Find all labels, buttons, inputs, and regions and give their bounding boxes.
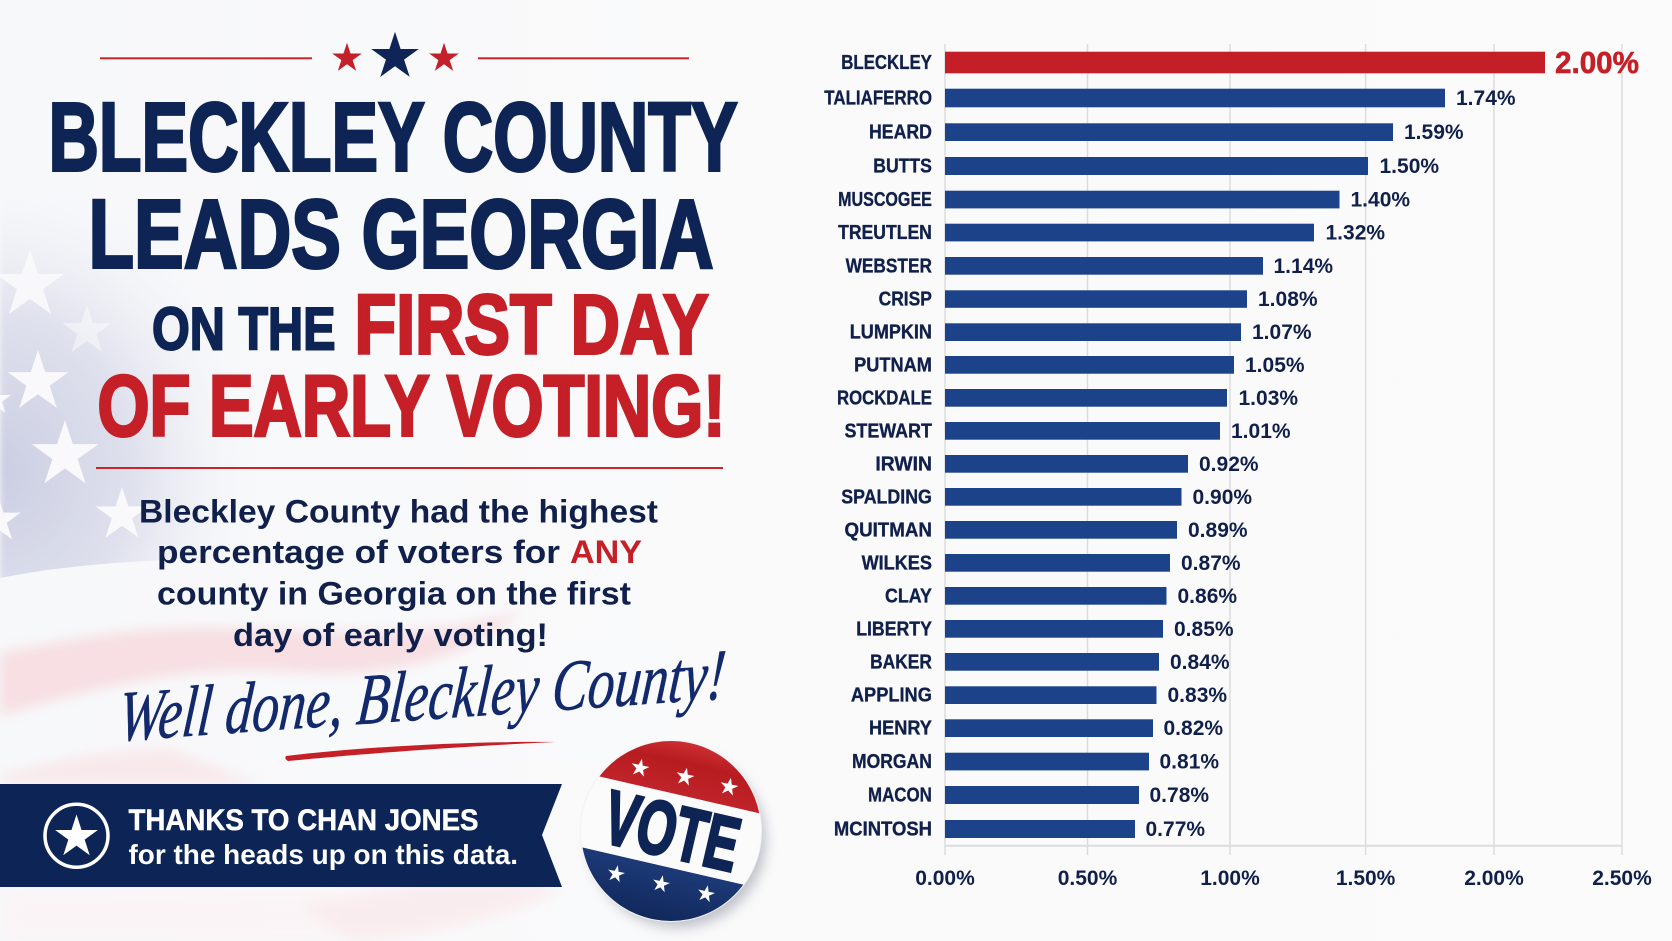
- value labels: 0.78%: [1150, 784, 1209, 807]
- title: BLECKLEY COUNTY: [48, 82, 738, 192]
- description text: ANY: [570, 534, 642, 570]
- county labels: BUTTS: [873, 156, 932, 178]
- county labels: BAKER: [870, 652, 932, 674]
- description text: Bleckley County had the highest: [139, 493, 658, 529]
- top ornament: rules and stars: [100, 32, 689, 77]
- value labels: 1.05%: [1245, 354, 1305, 377]
- value labels: 1.08%: [1258, 288, 1318, 311]
- title: ON THE: [152, 296, 336, 362]
- description text: day of early voting!: [233, 617, 548, 653]
- county labels: HEARD: [869, 122, 932, 144]
- title: LEADS GEORGIA: [88, 180, 714, 288]
- value labels: 0.83%: [1168, 684, 1227, 707]
- county labels: TREUTLEN: [838, 222, 932, 244]
- axis labels: 1.00%: [1200, 867, 1260, 890]
- county labels: [824, 88, 932, 840]
- county labels: MUSCOGEE: [838, 189, 932, 211]
- value labels: 1.03%: [1238, 387, 1298, 410]
- title: [48, 82, 738, 454]
- value labels: [1146, 87, 1516, 841]
- axis labels: 0.50%: [1058, 867, 1118, 890]
- title: OF EARLY VOTING!: [98, 358, 726, 454]
- value labels: 0.92%: [1199, 453, 1259, 476]
- axis labels: 1.50%: [1336, 867, 1396, 890]
- county bars: [945, 89, 1445, 838]
- value labels: 1.74%: [1456, 87, 1516, 110]
- value labels: 1.14%: [1274, 255, 1333, 278]
- county labels: LIBERTY: [856, 618, 932, 640]
- county labels: MACON: [868, 784, 932, 806]
- county labels: PUTNAM: [854, 354, 932, 376]
- highlighted bar: Bleckley: BLECKLEY: [841, 52, 932, 74]
- value labels: 0.81%: [1160, 750, 1219, 773]
- county labels: LUMPKIN: [850, 322, 932, 344]
- value labels: 0.82%: [1164, 717, 1223, 740]
- value labels: 1.40%: [1350, 188, 1410, 211]
- red underline swoosh: [285, 742, 555, 761]
- county labels: MCINTOSH: [834, 818, 932, 840]
- county labels: SPALDING: [841, 486, 932, 508]
- vote button: [582, 741, 772, 934]
- icon: star in circle: [45, 804, 108, 867]
- value labels: 1.07%: [1252, 321, 1312, 344]
- axis labels: 2.50%: [1592, 867, 1652, 890]
- description text: percentage of voters for: [157, 534, 560, 570]
- vote button: VOTE: [596, 775, 748, 888]
- highlighted bar: Bleckley: [841, 45, 1639, 80]
- county labels: ROCKDALE: [837, 388, 932, 410]
- county labels: MORGAN: [852, 751, 932, 773]
- ribbon: thanks: for the heads up on this data.: [128, 839, 518, 870]
- value labels: 1.59%: [1404, 121, 1464, 144]
- ribbon: thanks: [0, 784, 562, 887]
- value labels: 1.01%: [1231, 420, 1291, 443]
- description text: [139, 493, 658, 653]
- axis labels: 2.00%: [1464, 867, 1524, 890]
- value labels: 0.86%: [1178, 585, 1237, 608]
- axis labels: [915, 867, 1652, 890]
- chart gridlines and axis: [945, 44, 1622, 855]
- county labels: APPLING: [851, 684, 932, 706]
- value labels: 1.50%: [1380, 155, 1439, 178]
- county labels: CLAY: [885, 586, 932, 608]
- script message: Well done, Bleckley County!: [116, 633, 729, 757]
- value labels: 1.32%: [1326, 221, 1385, 244]
- bar chart: [824, 44, 1652, 890]
- ribbon: thanks: THANKS TO CHAN JONES: [128, 804, 478, 837]
- value labels: 0.85%: [1174, 618, 1234, 641]
- title: FIRST DAY: [354, 278, 708, 372]
- county labels: WEBSTER: [846, 255, 932, 277]
- value labels: 0.77%: [1146, 818, 1205, 841]
- value labels: 0.90%: [1192, 486, 1252, 509]
- county labels: QUITMAN: [844, 520, 932, 542]
- value labels: 0.89%: [1188, 519, 1248, 542]
- county labels: HENRY: [869, 718, 932, 740]
- title rule: [96, 467, 723, 469]
- description text: county in Georgia on the first: [157, 575, 631, 611]
- highlighted bar: Bleckley: 2.00%: [1555, 45, 1639, 80]
- value labels: 0.84%: [1170, 651, 1230, 674]
- value labels: 0.87%: [1181, 552, 1241, 575]
- background: faded flag: [0, 226, 550, 941]
- county labels: STEWART: [844, 420, 932, 442]
- county labels: CRISP: [879, 288, 932, 310]
- county labels: WILKES: [862, 552, 932, 574]
- axis labels: 0.00%: [915, 867, 975, 890]
- county labels: TALIAFERRO: [824, 88, 932, 110]
- county labels: IRWIN: [875, 454, 932, 476]
